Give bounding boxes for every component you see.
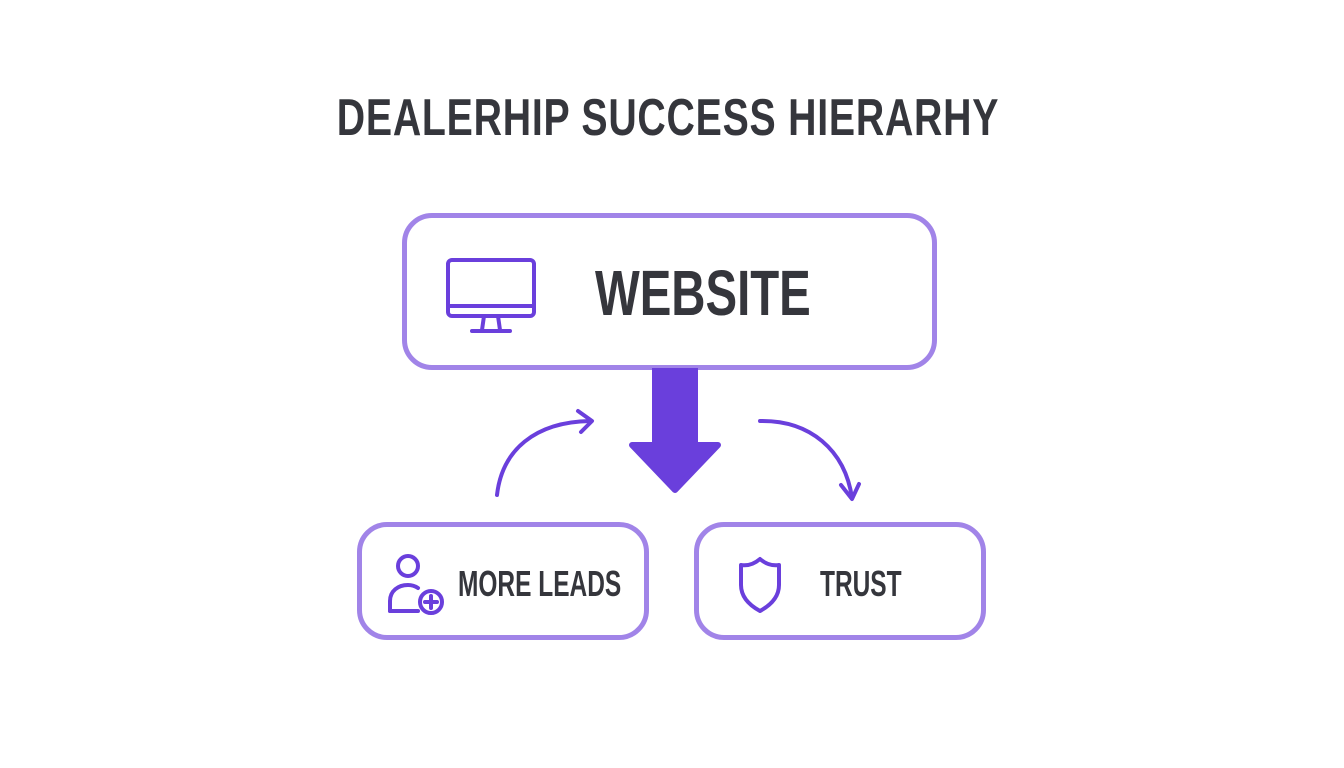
arrow: left curve <box>495 408 594 497</box>
panel: more leads <box>357 522 649 640</box>
icon: person plus <box>388 554 444 615</box>
text: trust: TRUST <box>820 563 902 604</box>
icon: shield <box>739 556 781 613</box>
text: website: WEBSITE <box>595 257 811 329</box>
panel: trust <box>694 522 986 640</box>
icon: monitor <box>446 258 536 333</box>
text: more leads: MORE LEADS <box>458 563 621 604</box>
panel: website <box>402 213 937 370</box>
title: DEALERHIP SUCCESS HIERARHY <box>337 89 999 147</box>
arrow: right curve <box>758 419 862 502</box>
arrow: down <box>629 368 721 493</box>
